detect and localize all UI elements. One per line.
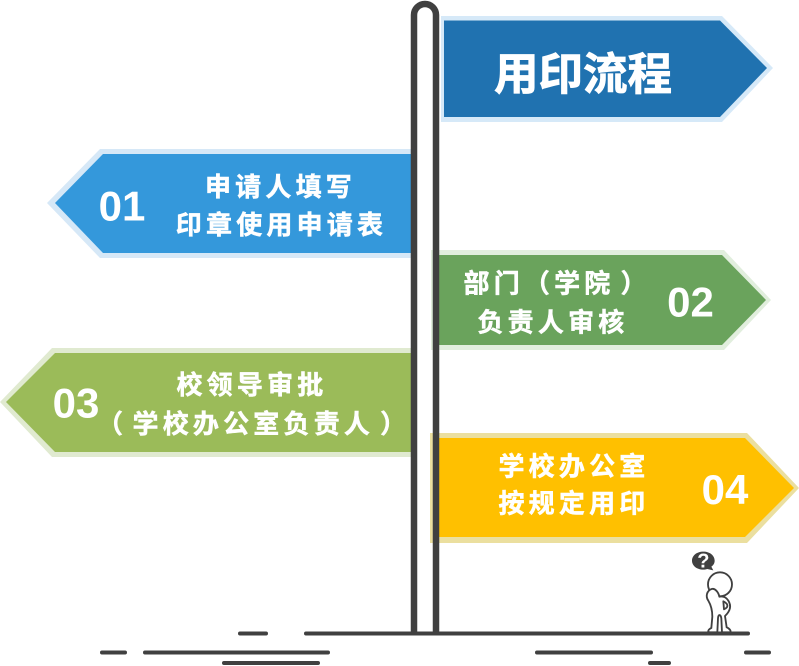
panel: title arrow — [441, 16, 773, 122]
step number 04: 04 — [702, 466, 749, 513]
step 03 text — [97, 370, 410, 439]
icon: thinking person with question bubble — [692, 551, 732, 632]
step 02 text: 负责人审核 — [477, 308, 629, 338]
heading: process title: 用印流程 — [494, 50, 672, 100]
panel: step 01 sign — [47, 149, 411, 258]
step 01 text: 印章使用申请表 — [176, 210, 387, 240]
step 01 text: 申请人填写 — [205, 172, 356, 202]
icon: question bubble: ? — [697, 551, 709, 573]
step 03 text: （ — [97, 409, 127, 439]
step 03 text: 校领导审批 — [176, 370, 328, 400]
step 02 text: 部门（学院） — [464, 268, 651, 298]
step number 03: 03 — [53, 380, 99, 426]
step 03 text: ） — [380, 409, 410, 439]
step number 02: 02 — [667, 278, 714, 326]
step 04 text — [498, 452, 650, 518]
ground lines — [102, 634, 769, 663]
step 04 text: 学校办公室 — [498, 452, 650, 482]
panel: step 03 sign — [0, 348, 411, 457]
step 02 text — [464, 268, 651, 338]
person figure — [707, 572, 732, 632]
panel: step 04 sign — [430, 433, 799, 543]
step 01 text — [176, 172, 387, 240]
panel: step 02 sign — [431, 250, 771, 350]
step 03 text: 学校办公室负责人 — [132, 409, 374, 439]
signpost pole — [414, 4, 436, 633]
step number 01: 01 — [99, 182, 145, 230]
step 04 text: 按规定用印 — [498, 488, 650, 518]
